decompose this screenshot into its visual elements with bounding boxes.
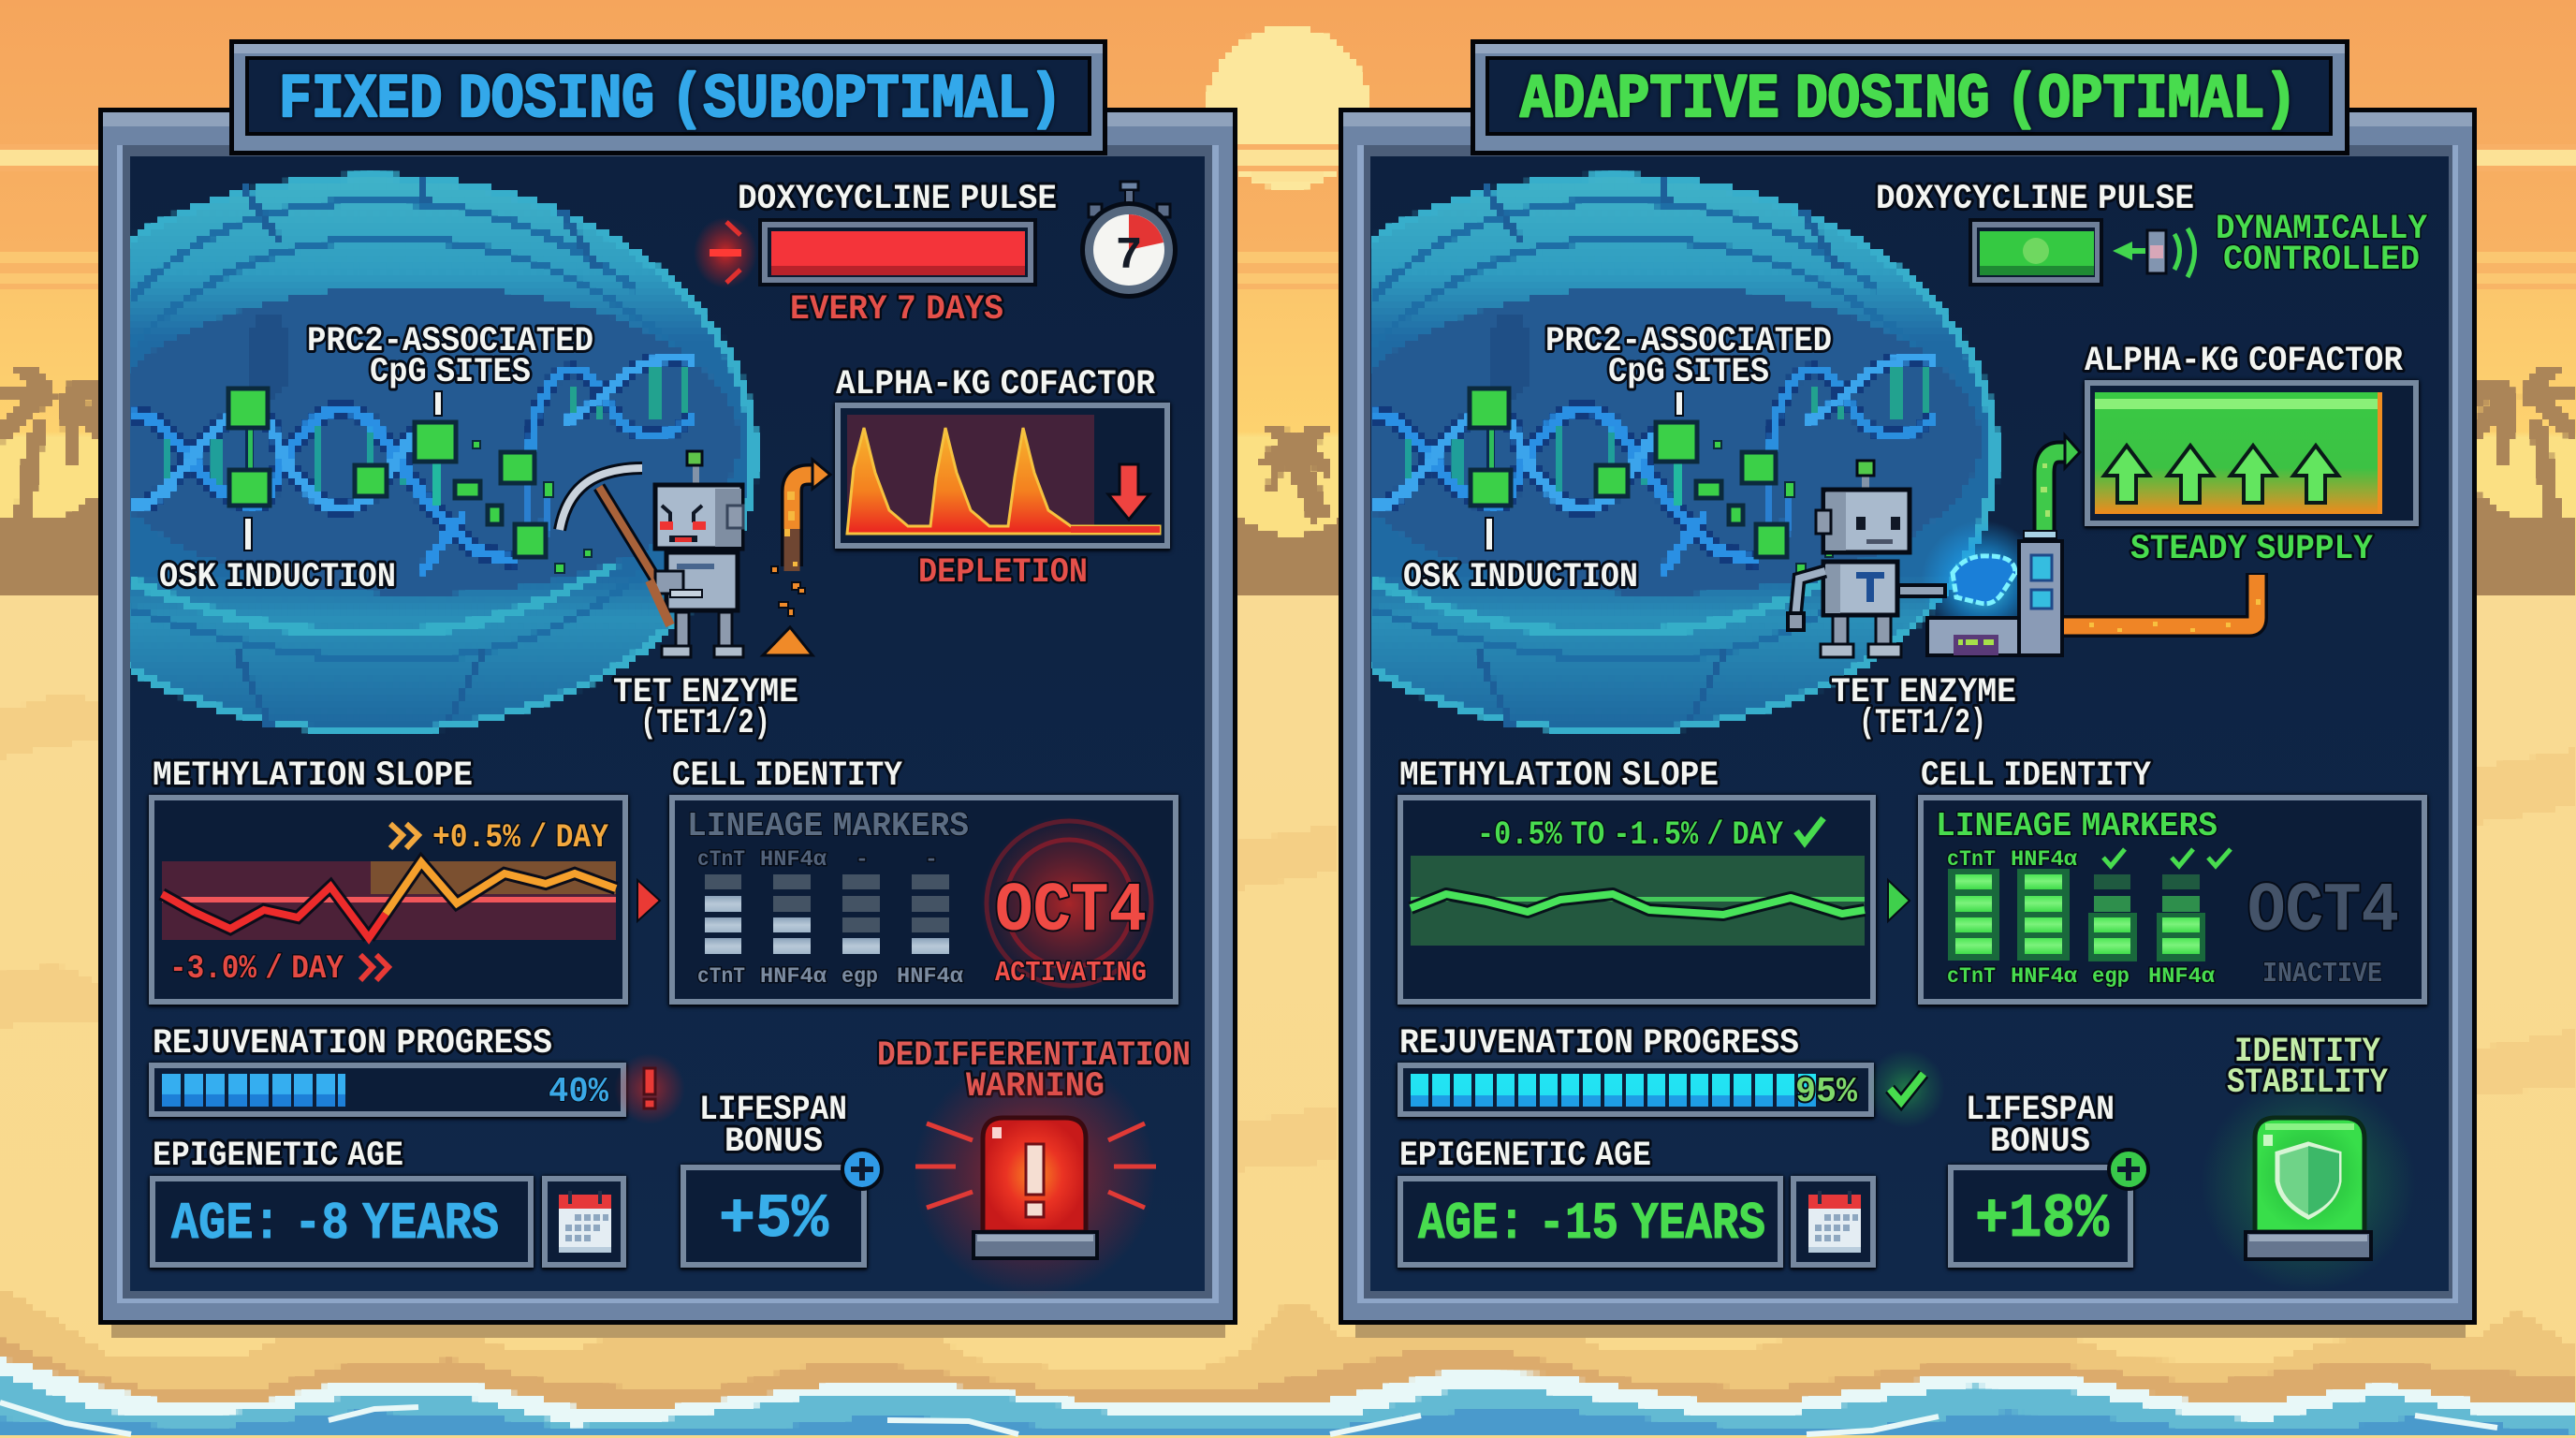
- panel: cell identity markers: HNF4α: [2011, 847, 2077, 872]
- readout: epigenetic age: [153, 1179, 531, 1265]
- illustration: DNA helix with CpG sites: [1374, 359, 1936, 573]
- panel: cell identity markers: -: [856, 847, 869, 872]
- panel: cell identity markers: cTnT: [1947, 964, 1996, 989]
- label: lifespan bonus: BONUS: [1990, 1123, 2090, 1162]
- icon: progress check: [1866, 1049, 1945, 1128]
- OCT4 activating glow: OCT4: [995, 873, 1147, 951]
- label: lifespan bonus: LIFESPAN: [699, 1091, 847, 1130]
- icon: green shield beacon: [2201, 1077, 2416, 1292]
- label: PRC2-associated CpG sites: CpG SITES: [1608, 353, 1769, 392]
- chart: methylation slope: -0.5% TO -1.5% / DAY: [1477, 816, 1783, 854]
- label: rejuvenation progress: REJUVENATION PROGRESS: [1399, 1024, 1799, 1064]
- icon: pulse rays: [694, 217, 757, 288]
- label: epigenetic age: EPIGENETIC AGE: [1399, 1137, 1651, 1176]
- illustration: cell nucleus: [0, 173, 758, 735]
- icon: warning mark: [614, 1053, 685, 1124]
- label: doxycycline pulse: DOXYCYCLINE PULSE: [738, 180, 1057, 219]
- label: methylation slope: METHYLATION SLOPE: [153, 756, 473, 796]
- panel heading: ADAPTIVE DOSING (OPTIMAL): [1520, 65, 2297, 135]
- arrow: slope to identity: [1888, 880, 1910, 921]
- label: TET enzyme: (TET1/2): [1859, 704, 1986, 743]
- panel heading: FIXED DOSING (SUBOPTIMAL): [279, 65, 1062, 135]
- label: steady supply: STEADY SUPPLY: [2130, 530, 2374, 569]
- label: dedifferentiation warning: [877, 1036, 1191, 1107]
- chart: alpha-KG depletion: [838, 405, 1167, 546]
- OCT4 inactive: OCT4: [2247, 873, 2399, 951]
- label: lifespan bonus: LIFESPAN: [1966, 1091, 2115, 1130]
- panel: cell identity markers: LINEAGE MARKERS: [687, 807, 969, 845]
- chart: methylation slope: -3.0% / DAY: [169, 950, 344, 988]
- label: alpha-KG cofactor: ALPHA-KG COFACTOR: [836, 365, 1156, 404]
- doxycycline pulse bar: [760, 220, 1035, 285]
- panel heading: [229, 39, 1107, 155]
- icon: TET robot at machine: [1788, 461, 2062, 657]
- icon: centre palm tree: [1251, 423, 1331, 522]
- panel frame: [98, 108, 1237, 1325]
- label: methylation slope: METHYLATION SLOPE: [1399, 756, 1719, 796]
- panel: cell identity markers: -: [925, 847, 938, 872]
- label: cell identity: CELL IDENTITY: [672, 756, 903, 796]
- panel: cell identity markers: HNF4α: [760, 964, 827, 989]
- label: OSK induction: OSK INDUCTION: [1403, 558, 1638, 597]
- panel: cell identity markers: [672, 798, 1176, 1002]
- label: PRC2-associated CpG sites: [1545, 322, 1832, 392]
- label: epigenetic age: EPIGENETIC AGE: [153, 1137, 403, 1176]
- panel frame: [1339, 108, 2477, 1325]
- label: PRC2-associated CpG sites: CpG SITES: [370, 353, 531, 392]
- readout: lifespan bonus: +5%: [719, 1184, 828, 1255]
- doxycycline pulse bar: [1970, 220, 2101, 285]
- label: TET enzyme: TET ENZYME: [1831, 673, 2016, 712]
- label: PRC2-associated CpG sites: [307, 322, 593, 392]
- readout: epigenetic age: [1400, 1179, 1780, 1265]
- icon: calendar: [545, 1179, 623, 1265]
- chart: alpha-KG steady supply: [2087, 383, 2416, 523]
- icon: stopwatch: 7: [1116, 231, 1142, 282]
- panel: cell identity markers: cTnT: [1947, 847, 1996, 872]
- label: dynamically controlled: CONTROLLED: [2223, 241, 2420, 280]
- panel: cell identity markers: HNF4α: [2148, 964, 2215, 989]
- OCT4 inactive: [2247, 873, 2399, 990]
- panel: cell identity markers: HNF4α: [760, 847, 827, 872]
- panel: cell identity markers: HNF4α: [897, 964, 963, 989]
- readout: lifespan bonus: +18%: [1975, 1184, 2109, 1255]
- panel heading: [1471, 39, 2349, 155]
- arrow: slope to identity: [637, 880, 660, 921]
- illustration: cell nucleus: [1228, 173, 1999, 735]
- label: lifespan bonus: [1966, 1091, 2115, 1162]
- icon: right palm tree: [2478, 365, 2576, 520]
- panel: cell identity markers: LINEAGE MARKERS: [1936, 807, 2217, 845]
- arrow: depleted cofactor feed: [763, 460, 830, 655]
- icon: left palm tree: [0, 365, 98, 520]
- foam streaks: [0, 1402, 2497, 1434]
- label: lifespan bonus: BONUS: [724, 1123, 823, 1162]
- icon: TET robot with pickaxe: [560, 451, 743, 657]
- OCT4 inactive: INACTIVE: [2262, 958, 2382, 990]
- panel: cell identity markers: [1921, 798, 2424, 1002]
- label: dynamically controlled: [2216, 210, 2428, 280]
- label: depletion: DEPLETION: [918, 553, 1088, 593]
- icon: red alarm: [913, 1053, 1156, 1297]
- label: dedifferentiation warning: WARNING: [966, 1067, 1105, 1107]
- panel: fixed dosing: [0, 39, 1237, 1325]
- label: TET enzyme: [1831, 673, 2016, 743]
- label: TET enzyme: (TET1/2): [640, 704, 770, 743]
- label: lifespan bonus: [699, 1091, 847, 1162]
- panel: cell identity markers: cTnT: [697, 964, 745, 989]
- chart: methylation slope: [152, 798, 625, 1002]
- label: dedifferentiation warning: DEDIFFERENTIATION: [877, 1036, 1191, 1076]
- label: dynamically controlled: DYNAMICALLY: [2216, 210, 2428, 249]
- arrow: orange substrate pipe: [2064, 573, 2261, 632]
- label: PRC2-associated CpG sites: PRC2-ASSOCIATED: [1545, 322, 1832, 361]
- label: cell identity: CELL IDENTITY: [1921, 756, 2152, 796]
- OCT4 activating glow: [980, 814, 1158, 992]
- label: TET enzyme: [613, 673, 798, 743]
- progress bar: 40%: [152, 1065, 623, 1114]
- panel: adaptive dosing: [1228, 39, 2477, 1325]
- label: rejuvenation progress: REJUVENATION PROGRESS: [153, 1024, 552, 1064]
- label: doxycycline pulse: DOXYCYCLINE PULSE: [1876, 180, 2194, 219]
- arrow: green cofactor output: [2041, 435, 2080, 532]
- panel: cell identity markers: egp: [842, 964, 878, 989]
- icon: stopwatch: [1080, 182, 1178, 299]
- progress bar: 95%: [1400, 1065, 1871, 1114]
- progress bar: 95%: 95%: [1795, 1072, 1857, 1112]
- label: every 7 days: EVERY 7 DAYS: [790, 290, 1003, 330]
- label: identity stability: IDENTITY: [2234, 1033, 2381, 1072]
- label: identity stability: STABILITY: [2227, 1064, 2389, 1103]
- icon: dose controller: [2113, 228, 2194, 277]
- label: alpha-KG cofactor: ALPHA-KG COFACTOR: [2085, 342, 2404, 381]
- progress bar: 40%: 40%: [549, 1072, 608, 1112]
- label: identity stability: [2227, 1033, 2389, 1103]
- readout: epigenetic age: AGE: -15 YEARS: [1418, 1194, 1765, 1254]
- chart: methylation slope: +0.5% / DAY: [432, 819, 608, 857]
- illustration: DNA helix with CpG sites: [133, 359, 695, 573]
- panel: cell identity markers: cTnT: [697, 847, 745, 872]
- OCT4 activating glow: ACTIVATING: [995, 957, 1147, 990]
- icon: calendar: [1793, 1179, 1873, 1265]
- label: PRC2-associated CpG sites: PRC2-ASSOCIATED: [307, 322, 593, 361]
- panel: cell identity markers: HNF4α: [2011, 964, 2077, 989]
- readout: epigenetic age: AGE: -8 YEARS: [171, 1194, 499, 1254]
- readout: lifespan bonus: [683, 1150, 882, 1265]
- chart: methylation slope: [1400, 798, 1873, 1002]
- readout: lifespan bonus: [1951, 1150, 2148, 1265]
- panel: cell identity markers: egp: [2092, 964, 2130, 989]
- label: TET enzyme: TET ENZYME: [613, 673, 798, 712]
- ocean waves: [0, 1339, 2576, 1438]
- label: OSK induction: OSK INDUCTION: [159, 558, 396, 597]
